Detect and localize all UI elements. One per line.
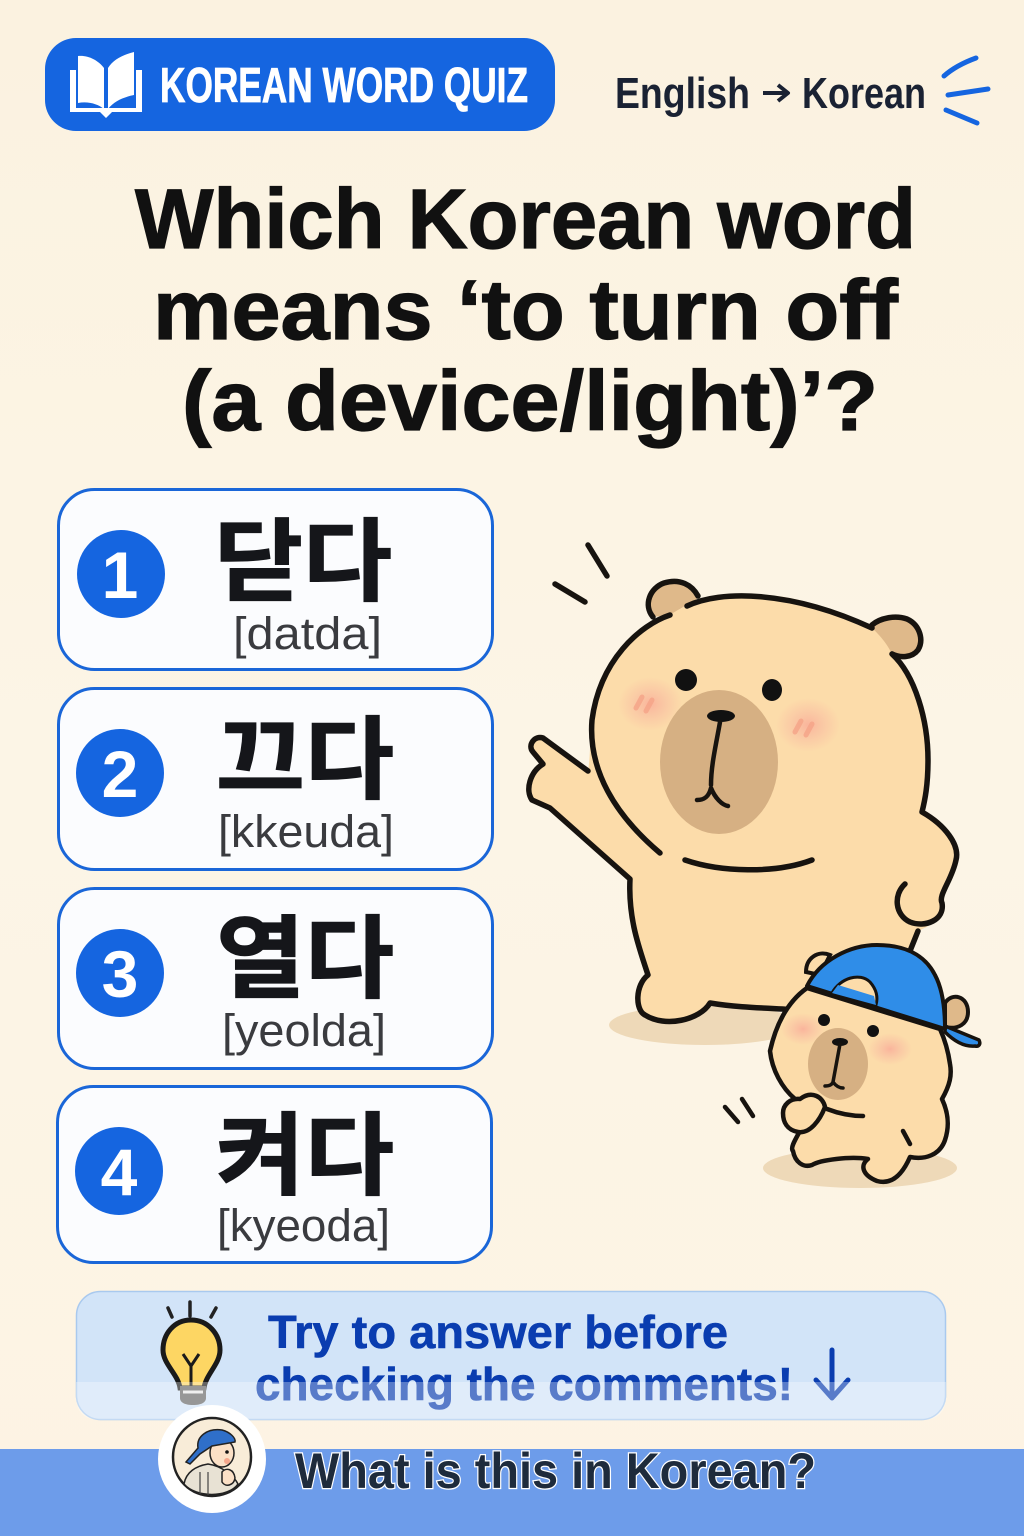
panel: answer option 4: [kyeoda] (217, 1200, 390, 1251)
icon: emphasis ticks by large bear (555, 545, 607, 602)
panel: answer option 2: 2 (102, 737, 138, 811)
title: question: means ‘to turn off (153, 263, 899, 357)
panel: answer option 1: [datda] (233, 608, 382, 659)
title: question: Which Korean word (135, 172, 916, 266)
panel: answer option 1 (58, 489, 492, 670)
avatar: boy with blue cap (158, 1405, 266, 1513)
icon: motion ticks by small bear (725, 1099, 753, 1122)
illustration: small bear with blue cap (763, 945, 980, 1188)
subtitle: English to Korean (615, 69, 926, 118)
small bear face (781, 1013, 912, 1100)
panel: answer option 3: [yeolda] (222, 1005, 386, 1056)
icon: accent rays (944, 58, 988, 123)
panel: answer option 1: 1 (102, 538, 138, 612)
banner text: What is this in Korean? (295, 1443, 816, 1499)
illustration: large bear pointing (529, 581, 957, 1045)
title: question: (a device/light)’? (182, 354, 878, 448)
panel: answer option 2: [kkeuda] (218, 806, 394, 857)
panel: answer option 3 (58, 886, 492, 1068)
prompt text (255, 1306, 793, 1410)
panel: answer option 4 (58, 1083, 492, 1262)
small bear hand (783, 1095, 825, 1132)
panel: answer option 3: 3 (102, 937, 138, 1011)
bear body fill (529, 594, 957, 1021)
icon: blue cap (807, 945, 980, 1046)
small bear ears (806, 954, 968, 1028)
icon: down arrow (816, 1350, 848, 1398)
panel: answer option 3: 열다 (216, 886, 394, 1016)
bear face (618, 669, 840, 834)
panel: answer option 1: 닫다 (214, 489, 392, 619)
icon: light bulb (163, 1302, 220, 1405)
callout: answer prompt panel (76, 1292, 946, 1420)
ears (648, 581, 921, 657)
prompt text: Try to answer before (268, 1306, 728, 1358)
prompt text: checking the comments! (255, 1358, 793, 1410)
bear outline (592, 615, 670, 853)
title: question (135, 172, 916, 448)
subtitle: English to Korean: English (615, 69, 750, 118)
panel: answer option 2: 끄다 (216, 687, 394, 817)
bottom banner (0, 1449, 1024, 1536)
small bear body (770, 988, 951, 1182)
panel: answer option 2 (58, 687, 492, 870)
badge label: KOREAN WORD QUIZ (160, 59, 528, 113)
subtitle: English to Korean: Korean (802, 69, 926, 118)
panel: answer option 4: 켜다 (216, 1083, 394, 1213)
panel: answer option 4: 4 (101, 1135, 138, 1209)
icon: open book (70, 52, 142, 118)
header badge: Korean Word Quiz (45, 38, 555, 131)
